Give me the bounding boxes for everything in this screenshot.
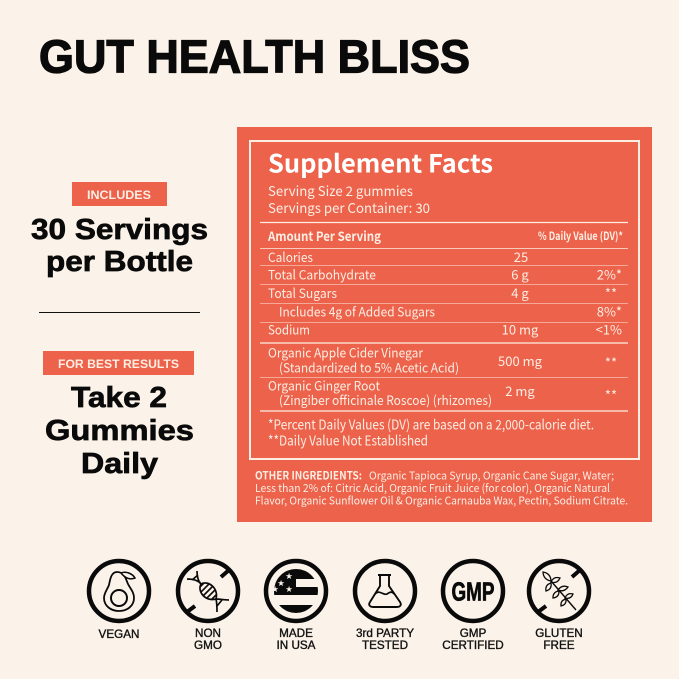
panel: best results <box>43 351 194 480</box>
nutrition rows: 4 g <box>511 283 529 302</box>
serving information: Serving Size 2 gummies <box>268 180 413 200</box>
icon: crossed dna <box>178 561 238 621</box>
icon: american flag: ★ <box>277 579 285 589</box>
label: 3rd party tested: 3rd PARTY <box>356 627 414 640</box>
nutrition rows: 8%* <box>597 302 622 320</box>
daily value footnotes <box>268 414 594 450</box>
icon: gmp seal: GMP <box>452 576 494 606</box>
badge: vegan <box>89 561 149 641</box>
other ingredients <box>255 468 628 508</box>
badge: gmp certified <box>442 561 504 652</box>
ingredient: apple cider vinegar: (Standardized to 5% Acetic Acid) <box>279 358 459 376</box>
label: gmp certified <box>442 627 504 652</box>
label: gmp certified: GMP <box>460 627 487 640</box>
dosage heading: Daily <box>81 448 158 480</box>
nutrition rows: ** <box>605 283 617 302</box>
badge: non gmo <box>178 561 238 652</box>
other ingredients: Flavor, Organic Sunflower Oil & Organic Carnauba Wax, Pectin, Sodium Citrate. <box>255 492 628 508</box>
icon: american flag: ★ <box>271 585 279 595</box>
label: made in usa <box>277 627 316 652</box>
servings heading: per Bottle <box>46 246 193 278</box>
panel: supplement facts <box>237 127 652 522</box>
serving information <box>268 180 430 217</box>
servings heading <box>31 214 208 278</box>
label: non gmo <box>194 627 222 652</box>
nutrition rows: Total Carbohydrate <box>268 264 376 284</box>
ingredient: apple cider vinegar: 500 mg <box>498 351 543 370</box>
nutrition rows: Includes 4g of Added Sugars <box>279 302 435 320</box>
nutrition rows: 10 mg <box>502 320 539 338</box>
ingredient: apple cider vinegar: ** <box>605 352 617 372</box>
label: 3rd party tested <box>356 627 414 652</box>
badge: made in usa <box>266 561 326 652</box>
table header: Amount Per Serving <box>267 226 381 245</box>
nutrition rows: Total Sugars <box>268 283 337 302</box>
label: 3rd party tested: TESTED <box>362 639 408 652</box>
dosage heading: Take 2 <box>71 382 167 414</box>
ingredient: ginger root: 2 mg <box>505 381 535 400</box>
servings heading: 30 Servings <box>31 214 208 246</box>
label: gluten free: GLUTEN <box>535 627 583 640</box>
ingredient: ginger root: (Zingiber officinale Roscoe) (rhizomes) <box>279 390 492 409</box>
serving information: Servings per Container: 30 <box>268 197 430 217</box>
icon: flask <box>355 561 415 621</box>
nutrition rows: 25 <box>514 247 528 266</box>
badge: third party tested <box>355 561 415 652</box>
badge: for best results <box>43 351 194 375</box>
label: gluten free <box>535 627 583 652</box>
label: made in usa: IN USA <box>277 639 316 652</box>
icon: american flag: ★ <box>285 572 293 582</box>
other ingredients: OTHER INGREDIENTS: <box>255 468 362 484</box>
label: made in usa: MADE <box>279 627 313 640</box>
supplement facts heading: Supplement Facts <box>268 144 493 180</box>
nutrition rows: 2%* <box>597 264 622 284</box>
nutrition rows: Sodium <box>268 320 310 338</box>
badge: for best results: FOR BEST RESULTS <box>58 357 179 371</box>
nutrition rows: 6 g <box>511 264 529 284</box>
other ingredients: Organic Tapioca Syrup, Organic Cane Sugar, Water; <box>369 468 614 484</box>
nutrition rows: Calories <box>268 247 313 266</box>
badge: includes <box>72 182 167 206</box>
ingredient: ginger root <box>268 376 617 409</box>
table header <box>267 226 623 245</box>
title: GUT HEALTH BLISS <box>39 30 470 82</box>
ingredient: ginger root: Organic Ginger Root <box>268 376 380 394</box>
icon: american flag: ★ <box>285 585 293 595</box>
table header: % Daily Value (DV)* <box>538 228 623 244</box>
icon: avocado <box>89 561 149 621</box>
label: gmp certified: CERTIFIED <box>442 639 504 652</box>
ingredient: apple cider vinegar: Organic Apple Cider Vinegar <box>268 342 424 362</box>
ingredient: ginger root: ** <box>605 385 617 404</box>
label: vegan: VEGAN <box>99 628 139 641</box>
nutrition rows: <1% <box>596 320 622 338</box>
nutrition rows <box>268 247 622 338</box>
panel: servings per bottle <box>31 182 208 278</box>
ingredient: apple cider vinegar <box>268 342 617 376</box>
icon: american flag <box>266 561 326 621</box>
dosage heading <box>45 382 194 480</box>
dosage heading: Gummies <box>45 415 194 447</box>
other ingredients: Less than 2% of: Citric Acid, Organic Fruit Juice (for color), Organic Natural <box>255 480 610 496</box>
daily value footnotes: **Daily Value Not Established <box>268 430 428 450</box>
badge: includes: INCLUDES <box>87 188 151 202</box>
label: non gmo: GMO <box>194 639 222 652</box>
icon: crossed wheat <box>529 561 589 621</box>
daily value footnotes: *Percent Daily Values (DV) are based on a 2,000-calorie diet. <box>268 414 594 434</box>
label: gluten free: FREE <box>543 639 575 652</box>
label: non gmo: NON <box>195 627 221 640</box>
badge: gluten free <box>529 561 589 652</box>
